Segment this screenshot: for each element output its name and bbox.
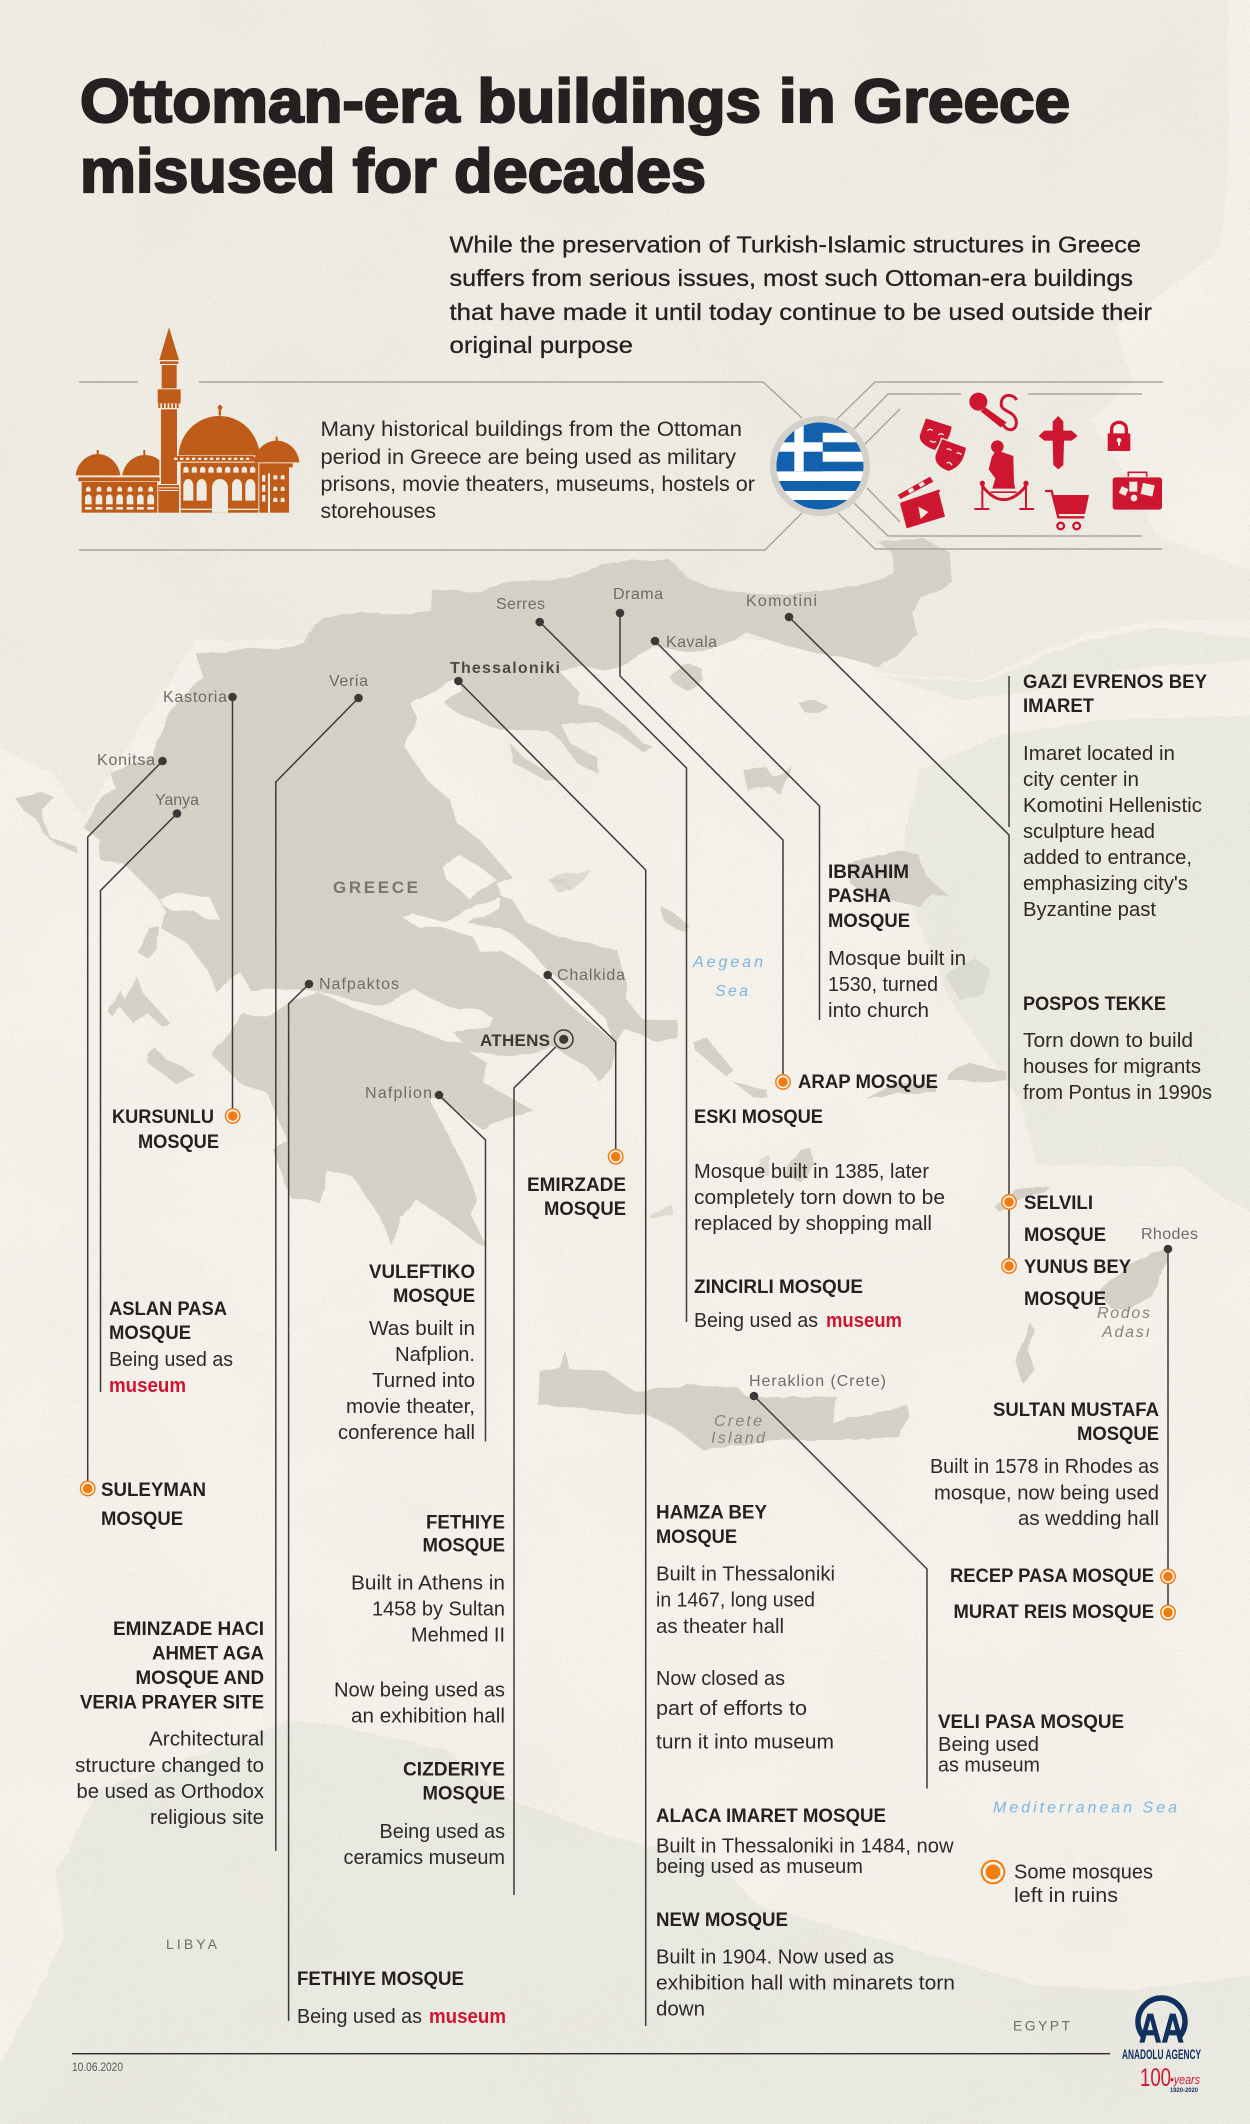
leader lines [88,613,1168,2026]
logo: Anadolu Agency: 100 [1140,2064,1171,2092]
entry: Zincirli Mosque: Being used as [694,1309,818,1332]
icon: mosque [76,327,299,513]
entry: Aslan Pasa Mosque: Being used as [109,1348,233,1371]
entry: New Mosque: exhibition hall with minarets torn [656,1972,955,1994]
city labels: Nafplion [365,1085,432,1102]
entry: Eminzade Haci Ahmet Aga Mosque and Veria Prayer Site: EMINZADE HACI [113,1619,264,1640]
entry: New Mosque: NEW MOSQUE [656,1910,788,1931]
entry: Murat Reis Mosque: MURAT REIS MOSQUE [954,1602,1154,1623]
entry: Hamza Bey Mosque [656,1502,835,1754]
country and sea labels: Rodos [1097,1305,1150,1322]
entry: Eski Mosque: completely torn down to be [694,1186,945,1209]
country and sea labels: LIBYA [166,1936,218,1952]
entry: Gazi Evrenos Bey Imaret: sculpture head [1023,820,1155,843]
entry: Alaca Imaret Mosque: Built in Thessaloniki in 1484, now [656,1834,954,1858]
entry: Alaca Imaret Mosque: ALACA IMARET MOSQUE [656,1806,886,1827]
city labels: Komotini [746,593,817,610]
entry: Aslan Pasa Mosque: ASLAN PASA [109,1299,227,1320]
entry: Eminzade Haci Ahmet Aga Mosque and Veria Prayer Site: Architectural [149,1728,264,1750]
entry: Sultan Mustafa Mosque: mosque, now being used [934,1482,1159,1504]
entry: Eski Mosque [694,1107,945,1235]
entry: Fethiye Mosque, museum: museum [429,2005,506,2028]
entry: Sultan Mustafa Mosque: MOSQUE [1077,1424,1159,1445]
orange ruin markers [80,1075,1175,1620]
footer rule and date: 10.06.2020 [72,2062,123,2074]
icon: suitcase [1113,472,1162,510]
description text: prisons, movie theaters, museums, hostels or [320,473,755,496]
map of Greece and islands [15,538,1168,1450]
entry: Gazi Evrenos Bey Imaret: IMARET [1023,696,1094,717]
entry: Arap Mosque: ARAP MOSQUE [798,1072,938,1093]
entry: Fethiye Mosque, Athens: Now being used as [334,1678,505,1702]
entry: Pospos Tekke: from Pontus in 1990s [1023,1081,1212,1104]
entry: Zincirli Mosque: museum [826,1309,902,1332]
Lefkada [138,925,158,957]
entry: Ibrahim Pasha Mosque: 1530, turned [828,973,938,996]
entry: Cizderiye Mosque: CIZDERIYE [403,1760,505,1780]
country and sea labels: EGYPT [1013,2018,1070,2034]
entry: Fethiye Mosque, Athens: 1458 by Sultan [372,1598,505,1620]
intro paragraph: original purpose [450,332,633,358]
country and sea labels: Adası [1101,1324,1150,1341]
description text: period in Greece are being used as military [320,446,737,469]
Skiathos islets [547,870,592,890]
entry: Vuleftiko Mosque: Turned into [372,1369,475,1392]
city labels: Yanya [155,792,199,809]
entry: Ibrahim Pasha Mosque [828,862,966,1022]
logo: Anadolu Agency [1122,1998,1201,2094]
legend: mosques left in ruins: Some mosques [1014,1860,1153,1884]
logo: Anadolu Agency: 1920-2020 [1170,2088,1199,2094]
entry: Sultan Mustafa Mosque: SULTAN MUSTAFA [993,1400,1159,1421]
city labels: ATHENS [480,1031,550,1050]
icon: microphone [969,393,1017,430]
Andros Tinos [693,1038,733,1077]
entry: Hamza Bey Mosque: Built in Thessaloniki [656,1562,835,1586]
city labels: Nafpaktos [319,976,399,993]
intro paragraph [450,232,1152,358]
entry: Sultan Mustafa Mosque: Built in 1578 in Rhodes as [930,1455,1159,1478]
entry: Ibrahim Pasha Mosque: MOSQUE [828,911,910,932]
entry: Gazi Evrenos Bey Imaret: emphasizing city's [1023,872,1188,895]
entry: Eminzade Haci Ahmet Aga Mosque and Veria Prayer Site [75,1619,265,1829]
entry: Zincirli Mosque: ZINCIRLI MOSQUE [694,1277,863,1298]
entry: Veli Pasa Mosque: VELI PASA MOSQUE [938,1712,1124,1733]
entry: Eminzade Haci Ahmet Aga Mosque and Veria Prayer Site: AHMET AGA [152,1644,264,1664]
entry: Selvili Mosque [1024,1193,1106,1246]
country and sea labels [166,878,1177,2034]
entry: Aslan Pasa Mosque: MOSQUE [109,1323,191,1344]
intro paragraph: that have made it until today continue to be used outside their [450,299,1152,325]
entry: Gazi Evrenos Bey Imaret: GAZI EVRENOS BEY [1023,672,1207,693]
entry: Vuleftiko Mosque: conference hall [338,1421,475,1444]
entry: Gazi Evrenos Bey Imaret: added to entrance, [1023,846,1192,869]
entry: Gazi Evrenos Bey Imaret: Imaret located in [1023,742,1175,765]
entry: Gazi Evrenos Bey Imaret: Komotini Hellenistic [1023,794,1202,817]
entry: New Mosque [656,1910,955,2020]
icon: cross [1039,416,1078,469]
Chios [945,958,990,1000]
Samothrace [798,700,828,713]
Kefalonia [108,977,170,1027]
entry: Gazi Evrenos Bey Imaret: city center in [1023,768,1139,791]
entry: Eminzade Haci Ahmet Aga Mosque and Veria Prayer Site: religious site [150,1806,264,1829]
description text [320,418,755,523]
Peloponnese [212,992,533,1247]
entry: Alaca Imaret Mosque: being used as museum [656,1855,863,1878]
city labels: Veria [329,673,368,690]
entry: Yunus Bey Mosque [1024,1257,1131,1310]
city labels: Heraklion (Crete) [749,1373,886,1390]
Skyros [662,908,690,933]
country and sea labels: Crete [714,1413,762,1430]
entry: Alaca Imaret Mosque [656,1806,954,1878]
description text: storehouses [320,500,436,523]
Limnos [743,767,793,795]
icon: film clapper [898,477,945,528]
entry: Suleyman Mosque: MOSQUE [101,1509,183,1530]
entry: Kursunlu Mosque [112,1107,219,1153]
country and sea labels: Aegean [692,954,763,971]
Corfu [15,793,77,853]
entry: Cizderiye Mosque [344,1760,505,1869]
entry: Cizderiye Mosque: MOSQUE [422,1784,505,1804]
city labels: Konitsa [97,752,155,769]
entry: Vuleftiko Mosque: Was built in [369,1317,475,1340]
city labels: Kastoria [163,689,227,706]
intro paragraph: While the preservation of Turkish-Islamic structures in Greece [450,232,1141,258]
city labels: Thessaloniki [450,660,560,677]
city labels: Chalkida [557,967,625,984]
country and sea labels: Sea [715,983,748,1000]
entry: Veli Pasa Mosque: Being used [938,1733,1039,1756]
legend: mosques left in ruins: left in ruins [1014,1884,1118,1907]
entry: Eminzade Haci Ahmet Aga Mosque and Veria Prayer Site: be used as Orthodox [76,1780,265,1803]
entry: Emirzade Mosque: EMIRZADE [527,1175,626,1196]
Kassandra [510,743,557,780]
Rhodes [1098,1250,1168,1310]
entry: Fethiye Mosque, museum [297,1969,506,2028]
entry: Fethiye Mosque, Athens: Built in Athens in [351,1572,505,1594]
description text: Many historical buildings from the Ottoman [320,418,742,441]
entry: New Mosque: Built in 1904. Now used as [656,1946,894,1968]
entry: Fethiye Mosque, Athens [334,1512,505,1728]
entry: Pospos Tekke [1023,994,1212,1104]
entry: Fethiye Mosque, Athens: Mehmed II [411,1624,505,1646]
entry: Pospos Tekke: Torn down to build [1023,1029,1193,1052]
entry: Fethiye Mosque, museum: Being used as [297,2005,422,2028]
entry: Fethiye Mosque, Athens: MOSQUE [422,1536,505,1556]
entry: Fethiye Mosque, Athens: FETHIYE [426,1512,505,1534]
entry: Hamza Bey Mosque: as theater hall [656,1615,784,1638]
entry: Ibrahim Pasha Mosque: PASHA [828,886,891,907]
entry: Eski Mosque: ESKI MOSQUE [694,1107,823,1128]
city location dots [158,609,1172,1400]
icon: museum statue [974,440,1034,509]
entry: Vuleftiko Mosque: MOSQUE [393,1286,475,1307]
entry: Yunus Bey Mosque: MOSQUE [1024,1289,1106,1310]
entry: Ibrahim Pasha Mosque: IBRAHIM [828,862,909,883]
entry: Cizderiye Mosque: Being used as [380,1820,505,1843]
Lesbos [847,851,950,907]
entry: Vuleftiko Mosque: movie theater, [346,1395,475,1418]
entry: Vuleftiko Mosque: VULEFTIKO [369,1262,475,1283]
title: misused for decades [80,137,706,205]
city labels: Drama [613,586,663,603]
entry: Eski Mosque: replaced by shopping mall [694,1212,932,1235]
country and sea labels: Mediterranean Sea [993,1800,1177,1816]
entry: Emirzade Mosque: MOSQUE [544,1199,626,1220]
icons: uses of the buildings [898,393,1162,529]
entry: Selvili Mosque: SELVILI [1024,1193,1093,1214]
entry: Eminzade Haci Ahmet Aga Mosque and Veria Prayer Site: structure changed to [75,1754,264,1777]
city labels: Kavala [666,634,717,651]
header connector lines [79,382,1163,550]
icon: Greek flag [770,416,870,516]
entry: Sultan Mustafa Mosque: as wedding hall [1018,1507,1159,1530]
entry: Gazi Evrenos Bey Imaret [1023,672,1207,921]
entry: Eski Mosque: Mosque built in 1385, later [694,1160,929,1183]
entry: Hamza Bey Mosque: HAMZA BEY [656,1502,767,1524]
entry: Suleyman Mosque: SULEYMAN [101,1480,206,1501]
city labels: Serres [496,596,545,613]
entry: Fethiye Mosque, Athens: an exhibition hall [351,1704,505,1728]
entry: Ibrahim Pasha Mosque: Mosque built in [828,947,966,970]
entry: Veli Pasa Mosque: as museum [938,1754,1040,1776]
entry: Kursunlu Mosque: MOSQUE [138,1132,219,1153]
Kos [995,1187,1050,1213]
entry: Vuleftiko Mosque: Nafplion. [395,1343,475,1366]
entry: Recep Pasa Mosque: RECEP PASA MOSQUE [950,1566,1154,1587]
entry: Hamza Bey Mosque: part of efforts to [656,1697,807,1720]
icon: theatre masks [920,418,967,472]
logo: Anadolu Agency: AA [1139,2005,1184,2051]
entry: Selvili Mosque: MOSQUE [1024,1225,1106,1246]
title: Ottoman-era buildings in Greece [80,67,1070,135]
entry: Eminzade Haci Ahmet Aga Mosque and Veria Prayer Site: VERIA PRAYER SITE [80,1692,264,1714]
entry: Suleyman Mosque [101,1480,206,1530]
entry: Veli Pasa Mosque [938,1712,1124,1776]
country and sea labels: GREECE [333,878,418,897]
city labels: Rhodes [1141,1226,1198,1243]
entry: Aslan Pasa Mosque: museum [109,1374,186,1397]
entry: Vuleftiko Mosque [338,1262,475,1444]
entry: Cizderiye Mosque: ceramics museum [344,1846,505,1869]
Karpathos [1015,1323,1035,1383]
intro paragraph: suffers from serious issues, most such Ottoman-era buildings [450,265,1133,291]
entry: Fethiye Mosque, museum: FETHIYE MOSQUE [297,1969,464,1990]
country and sea labels: Island [711,1430,766,1447]
icon: lock [1108,422,1130,451]
icon: shopping cart [1045,491,1089,529]
Thasos [670,662,703,690]
mainland Greece [83,538,953,1082]
Samos [947,1063,1007,1083]
sea gulfs [160,855,612,1040]
entry: Emirzade Mosque [527,1175,626,1220]
legend: mosques left in ruins [982,1860,1153,1907]
entry: Pospos Tekke: houses for migrants [1023,1055,1201,1078]
entry: Gazi Evrenos Bey Imaret: Byzantine past [1023,898,1156,921]
entry: Hamza Bey Mosque: Now closed as [656,1667,785,1690]
title [80,67,1070,205]
entry: Hamza Bey Mosque: in 1467, long used [656,1588,815,1612]
entry: Hamza Bey Mosque: MOSQUE [656,1527,737,1548]
entry: Zincirli Mosque [694,1277,902,1332]
entry: Kursunlu Mosque: KURSUNLU [112,1107,214,1128]
entry: Pospos Tekke: POSPOS TEKKE [1023,994,1166,1015]
Naxos Paros [783,1148,815,1182]
entry: Eminzade Haci Ahmet Aga Mosque and Veria Prayer Site: MOSQUE AND [136,1668,264,1689]
Zakynthos [147,1048,195,1083]
entry: Ibrahim Pasha Mosque: into church [828,999,929,1022]
entry: Sultan Mustafa Mosque [930,1400,1159,1530]
entry: Hamza Bey Mosque: turn it into museum [656,1730,834,1754]
entry: Aslan Pasa Mosque [109,1299,233,1397]
Crete [538,1350,910,1450]
city labels [97,586,1198,1390]
entry: New Mosque: down [656,1998,705,2020]
Ikaria [867,1083,937,1100]
logo: Anadolu Agency: •years [1170,2072,1200,2087]
entry: Yunus Bey Mosque: YUNUS BEY [1024,1257,1131,1278]
